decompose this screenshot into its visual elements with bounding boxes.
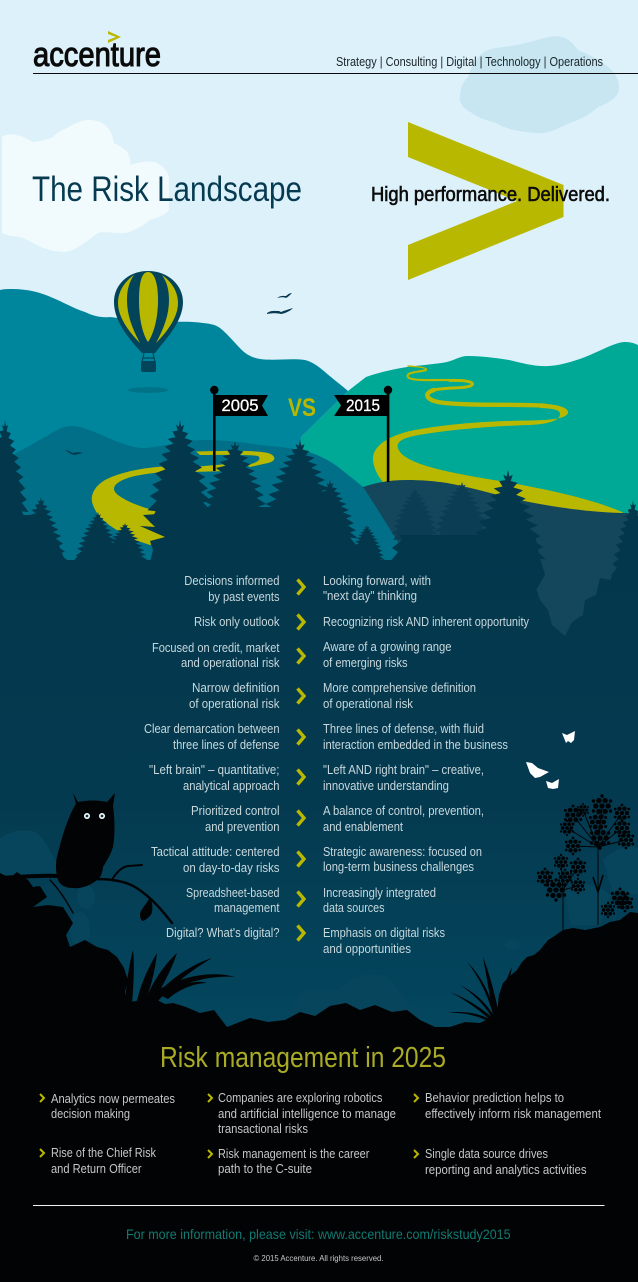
ground silhouette <box>0 507 545 600</box>
trees: far ridge <box>391 482 490 540</box>
left column: 2005: Focused on credit, market <box>152 641 280 655</box>
mountain: teal back left <box>0 289 348 560</box>
background blobs <box>0 830 638 1020</box>
mound silhouette <box>0 872 638 1282</box>
bullet text: and Return Officer <box>51 1162 142 1176</box>
right column: 2015: and opportunities <box>323 942 411 956</box>
road: 2015 winding path <box>373 366 630 520</box>
bullet text: Companies are exploring robotics <box>218 1091 382 1105</box>
balloon <box>114 271 183 393</box>
right column: 2015: More comprehensive definition <box>323 681 476 695</box>
owl on branch <box>0 793 172 923</box>
bullet text: Risk management is the career <box>218 1147 369 1161</box>
slogan: High performance. Delivered. <box>371 184 610 206</box>
right column: 2015: interaction embedded in the business <box>323 738 508 752</box>
road: 2005 winding path <box>92 446 274 545</box>
butterflies <box>526 731 575 789</box>
right column: 2015: Three lines of defense, with fluid <box>323 722 484 736</box>
flag: 2005 <box>210 386 268 471</box>
left column: 2005: Narrow definition <box>192 681 280 695</box>
right column: 2015: Emphasis on digital risks <box>323 926 445 940</box>
balloon envelope <box>114 271 183 353</box>
left column: 2005: Digital? What's digital? <box>166 926 280 940</box>
black foreground <box>0 872 638 1282</box>
owl eyes <box>84 813 90 819</box>
trees <box>0 420 638 586</box>
right column: 2015: of emerging risks <box>323 656 408 670</box>
right column: 2015: long-term business challenges <box>323 860 474 874</box>
right column: 2015: of operational risk <box>323 697 414 711</box>
bullet chevrons <box>40 1094 418 1158</box>
flag: 2015: 2015 <box>346 396 380 415</box>
right column: 2015: Strategic awareness: focused on <box>323 845 482 859</box>
left column: 2005: of operational risk <box>189 697 280 711</box>
mountain: mid teal <box>0 426 403 600</box>
left column: 2005: Clear demarcation between <box>144 722 280 736</box>
balloon basket <box>142 353 155 362</box>
left column: 2005 <box>144 574 280 940</box>
right column: 2015: Aware of a growing range <box>323 640 452 654</box>
balloon shadow <box>128 387 168 393</box>
left column: 2005: "Left brain" – quantitative; <box>149 763 280 777</box>
grass: right <box>448 957 512 1025</box>
logo: accenture <box>33 31 161 74</box>
vs label: VS <box>288 394 316 422</box>
birds <box>65 293 293 455</box>
bullet text: Behavior prediction helps to <box>425 1091 564 1105</box>
left column: 2005: Spreadsheet-based <box>186 886 280 900</box>
right column: 2015: "next day" thinking <box>323 589 417 603</box>
branch <box>0 865 172 923</box>
bullet text: decision making <box>51 1107 130 1121</box>
left column: 2005: Prioritized control <box>191 804 280 818</box>
owl body <box>56 793 115 888</box>
left column: 2005: analytical approach <box>183 779 280 793</box>
copyright: © 2015 Accenture. All rights reserved. <box>254 1253 384 1263</box>
cloud: blue upper right <box>460 36 619 133</box>
right column: 2015: data sources <box>323 901 384 915</box>
comparison list: 2005 vs 2015 <box>144 574 530 956</box>
right column: 2015: Looking forward, with <box>323 574 431 588</box>
bullet text: Rise of the Chief Risk <box>51 1146 157 1160</box>
big chevron <box>408 122 564 280</box>
flag: 2005: 2005 <box>222 396 258 415</box>
bullet text: transactional risks <box>218 1122 308 1136</box>
bullet text: effectively inform risk management <box>425 1107 601 1121</box>
logo wordmark: accenture <box>33 36 161 74</box>
panel: 2025 bullets <box>40 1091 601 1177</box>
bullet text: reporting and analytics activities <box>425 1163 587 1177</box>
right column: 2015: "Left AND right brain" – creative, <box>323 763 484 777</box>
right column: 2015 <box>323 574 530 956</box>
mountain: green right <box>280 342 638 560</box>
right column: 2015: A balance of control, prevention, <box>323 804 484 818</box>
left column: 2005: Decisions informed <box>184 574 280 588</box>
right column: 2015: and enablement <box>323 820 403 834</box>
left column: 2005: three lines of defense <box>173 738 280 752</box>
tagline: Strategy | Consulting | Digital | Technology | Operations <box>336 55 603 69</box>
flowering plants <box>537 794 634 932</box>
bullet text: and artificial intelligence to manage <box>218 1107 396 1121</box>
left column: 2005: on day-to-day risks <box>183 861 280 875</box>
bullet text: Analytics now permeates <box>51 1092 175 1106</box>
right column: 2015: innovative understanding <box>323 779 449 793</box>
left column: 2005: and prevention <box>205 820 280 834</box>
hill: right dark <box>363 480 638 600</box>
heading: Risk management in 2025: Risk management in 2025 <box>160 1042 446 1074</box>
footer link: For more information, please visit: www.accenture.com/riskstudy2015 <box>126 1227 511 1242</box>
title: The Risk Landscape <box>32 170 302 209</box>
bullet text: path to the C-suite <box>218 1162 312 1176</box>
grass: left <box>125 950 235 1005</box>
forest <box>0 420 638 600</box>
leaf <box>140 897 152 921</box>
left column: 2005: Tactical attitude: centered <box>151 845 280 859</box>
faint hanging tree <box>532 530 625 636</box>
plant stems <box>545 806 626 932</box>
bullet text: Single data source drives <box>425 1147 548 1161</box>
logo chevron <box>108 31 121 43</box>
right column: 2015: Increasingly integrated <box>323 886 436 900</box>
left column: 2005: management <box>214 901 280 915</box>
left column: 2005: by past events <box>208 590 280 604</box>
left column: 2005: and operational risk <box>181 656 280 670</box>
deep background <box>0 560 638 1040</box>
chevrons <box>298 580 304 940</box>
left column: 2005: Risk only outlook <box>194 615 280 629</box>
flower clusters <box>537 794 634 918</box>
cloud: white left <box>2 120 169 252</box>
bullet text <box>51 1091 601 1177</box>
flag: 2015 <box>334 386 392 482</box>
right column: 2015: Recognizing risk AND inherent opportunity <box>323 615 530 629</box>
